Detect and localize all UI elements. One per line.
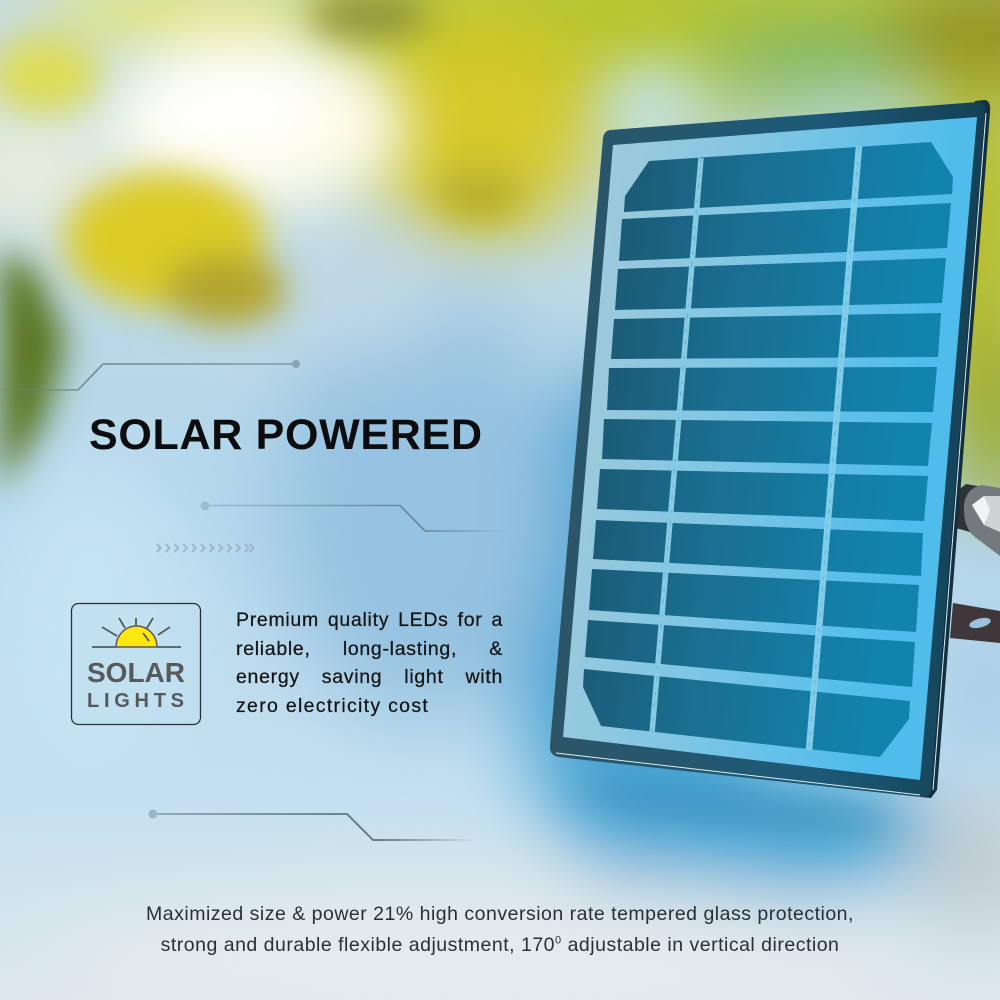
panel frame — [550, 102, 985, 797]
title: SOLAR POWERED — [89, 411, 482, 459]
panel glass — [563, 117, 977, 780]
solar panel — [550, 100, 1000, 798]
solar lights badge: LIGHTS — [87, 690, 184, 712]
bottom caption: strong and durable flexible adjustment, 1700 adjustable in vertical direction — [161, 934, 839, 956]
solar cells — [583, 142, 953, 757]
bottom caption — [146, 903, 854, 956]
right bus wire — [809, 146, 859, 750]
icon: sun — [92, 618, 181, 647]
feature description text — [236, 609, 503, 716]
frame edge highlights — [556, 113, 986, 795]
chevron row — [157, 544, 254, 552]
decorative circuit line 3 — [148, 810, 475, 840]
decorative circuit line 2 — [200, 502, 510, 531]
panel back edge — [920, 100, 990, 798]
feature description text: energy saving light with — [236, 666, 503, 688]
panel mounting bracket with bolt and strap — [950, 484, 1000, 643]
bottom caption: Maximized size & power 21% high conversion rate tempered glass protection, — [146, 903, 854, 925]
solar lights badge — [72, 604, 200, 724]
feature description text: Premium quality LEDs for a — [236, 609, 503, 631]
decorative circuit line 1 — [0, 360, 300, 390]
feature description text: zero electricity cost — [236, 694, 429, 716]
left bus wire — [652, 158, 701, 733]
feature description text: reliable, long-lasting, & — [236, 638, 503, 660]
badge wordmark: SOLAR — [87, 657, 185, 688]
